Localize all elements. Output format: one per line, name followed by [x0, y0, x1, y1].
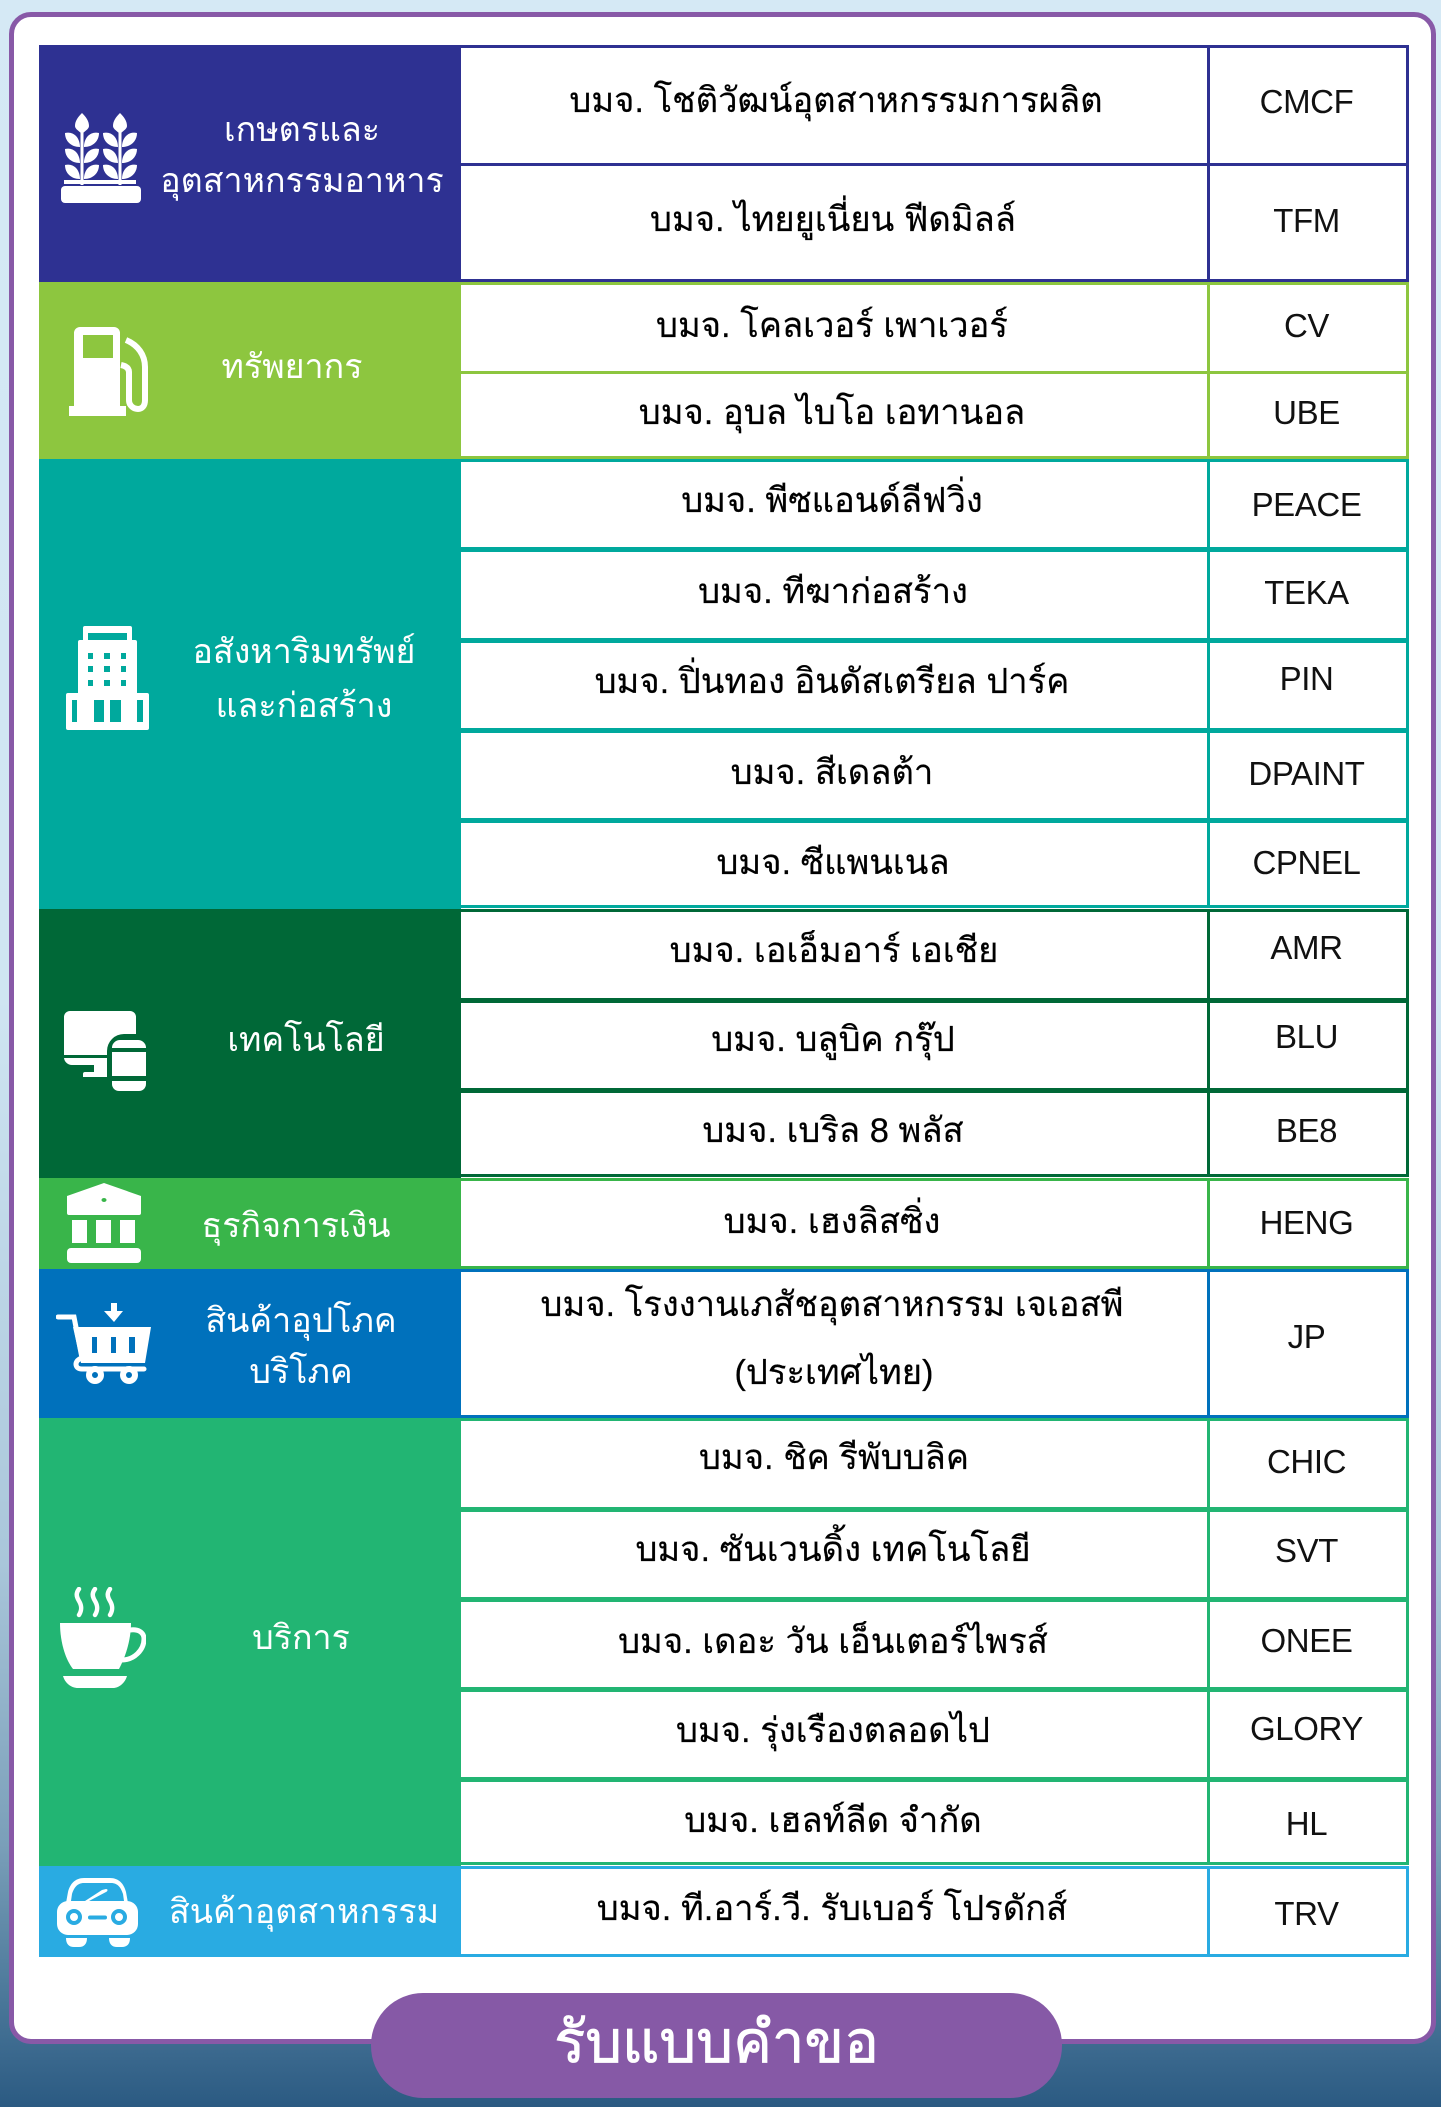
icon: wheat [61, 113, 141, 203]
company name: บมจ. เดอะ วัน เอ็นเตอร์ไพรส์ [618, 1623, 1048, 1661]
ticker: PIN [1280, 660, 1333, 697]
row: HENG [461, 1178, 1409, 1269]
ticker [1207, 1869, 1406, 1954]
company name: บมจ. เอเอ็มอาร์ เอเชีย [670, 932, 998, 970]
panel: services [39, 1418, 1409, 1866]
ticker: BE8 [1276, 1112, 1337, 1149]
ticker: HL [1286, 1805, 1327, 1842]
label: technology: เทคโนโลยี [227, 1021, 385, 1059]
category block: resources [39, 282, 461, 459]
label: finance: ธุรกิจการเงิน [202, 1207, 390, 1245]
panel: resources [39, 282, 1409, 459]
ticker: CV [1284, 307, 1329, 344]
row: TFM [461, 163, 1409, 282]
ticker [1207, 1003, 1406, 1088]
row: HL [461, 1777, 1409, 1865]
row: CPNEL [461, 818, 1409, 908]
ticker: UBE [1273, 394, 1340, 431]
label: construction: และก่อสร้าง [216, 687, 392, 725]
label: agriculture: เกษตรและ [224, 111, 380, 149]
ticker [1207, 1181, 1406, 1266]
ticker: ONEE [1261, 1622, 1352, 1659]
icon: computer and phone [64, 1011, 146, 1091]
company name line 1: บมจ. โรงงานเภสัชอุตสาหกรรม เจเอสพี [541, 1286, 1123, 1324]
panel: finance [39, 1178, 1409, 1269]
ticker: PEACE [1252, 486, 1361, 523]
company name: บมจ. บลูบิค กรุ๊ป [711, 1021, 955, 1059]
row: JP [461, 1269, 1409, 1418]
company name: บมจ. ชิค รีพับบลิค [699, 1439, 969, 1477]
company name: บมจ. ไทยยูเนี่ยน ฟีดมิลล์ [650, 201, 1016, 239]
button: request form: รับแบบคำขอ [554, 2010, 879, 2075]
label: industrials: สินค้าอุตสาหกรรม [169, 1893, 439, 1931]
label: consumer line 2: บริโภค [249, 1353, 353, 1391]
label: property: อสังหาริมทรัพย์ [193, 633, 415, 671]
icon: car [57, 1878, 138, 1947]
row: GLORY [461, 1687, 1409, 1777]
company name: บมจ. ทีฆาก่อสร้าง [698, 573, 968, 611]
ticker [1207, 912, 1406, 999]
ticker: GLORY [1250, 1710, 1363, 1747]
ticker [1207, 1421, 1406, 1508]
row: DPAINT [461, 728, 1409, 818]
ticker: AMR [1270, 929, 1343, 966]
ticker: HENG [1260, 1204, 1353, 1241]
category block: finance [39, 1178, 461, 1269]
row: CMCF [461, 45, 1409, 163]
ticker [1207, 374, 1406, 456]
ticker [1207, 1093, 1406, 1174]
ticker [1207, 643, 1406, 728]
icon: building [66, 626, 149, 730]
button: request form [371, 1993, 1062, 2098]
company name: บมจ. อุบล ไบโอ เอทานอล [639, 394, 1025, 432]
category block: technology [39, 909, 461, 1178]
ticker: CHIC [1267, 1443, 1346, 1480]
label: consumer: สินค้าอุปโภค [205, 1302, 397, 1340]
ticker: BLU [1275, 1018, 1338, 1055]
ticker [1207, 1602, 1406, 1687]
row: TEKA [461, 547, 1409, 638]
company name: บมจ. ซันเวนดิ้ง เทคโนโลยี [635, 1531, 1031, 1569]
panel: consumer products [39, 1269, 1409, 1418]
icon: shopping cart [56, 1303, 151, 1384]
ticker: TFM [1273, 202, 1340, 239]
icon: coffee cup [60, 1587, 146, 1688]
ticker: SVT [1275, 1532, 1338, 1569]
row: ONEE [461, 1597, 1409, 1687]
category block: services [39, 1418, 461, 1866]
category block: agriculture [39, 45, 461, 282]
panel: agriculture and food industry [39, 45, 1409, 282]
company name: บมจ. โชติวัฒน์อุตสาหกรรมการผลิต [569, 82, 1103, 120]
company name: บมจ. ปิ่นทอง อินดัสเตรียล ปาร์ค [595, 663, 1069, 701]
icon: bank [67, 1183, 141, 1263]
ticker [1207, 733, 1406, 818]
ticker: CPNEL [1252, 844, 1361, 881]
company name: บมจ. ซีแพนเนล [716, 844, 950, 882]
row: SVT [461, 1507, 1409, 1597]
ticker [1207, 1512, 1406, 1597]
ticker: TEKA [1264, 574, 1349, 611]
company name: บมจ. โคลเวอร์ เพาเวอร์ [656, 307, 1008, 345]
company name: บมจ. รุ่งเรืองตลอดไป [676, 1712, 990, 1750]
ticker [1207, 823, 1406, 905]
ticker: JP [1288, 1318, 1325, 1355]
row: AMR [461, 909, 1409, 999]
ticker [1207, 48, 1406, 163]
row: CHIC [461, 1418, 1409, 1508]
company name: บมจ. สีเดลต้า [731, 754, 933, 792]
label: services: บริการ [252, 1619, 350, 1657]
company name: บมจ. พีซแอนด์ลีฟวิ่ง [681, 482, 983, 520]
category block: industrials [39, 1866, 461, 1957]
ticker [1207, 285, 1406, 371]
company name line 2: (ประเทศไทย) [734, 1354, 934, 1392]
ticker [1207, 552, 1406, 638]
ticker [1207, 1272, 1406, 1415]
row: CV [461, 282, 1409, 371]
ticker: TRV [1274, 1895, 1339, 1932]
ticker [1207, 1692, 1406, 1777]
icon: fuel pump [69, 327, 148, 416]
row: PIN [461, 638, 1409, 728]
panel: technology [39, 909, 1409, 1178]
row: PEACE [461, 459, 1409, 548]
row: UBE [461, 371, 1409, 459]
row: TRV [461, 1866, 1409, 1957]
category block: property [39, 459, 461, 909]
ticker [1207, 166, 1406, 279]
panel: property and construction [39, 459, 1409, 909]
label: resources: ทรัพยากร [222, 348, 362, 386]
ticker: CMCF [1260, 83, 1353, 120]
company name: บมจ. ที.อาร์.วี. รับเบอร์ โปรดักส์ [597, 1890, 1067, 1928]
category block: consumer [39, 1269, 461, 1418]
row: BE8 [461, 1088, 1409, 1177]
ticker [1207, 462, 1406, 548]
company name: บมจ. เบริล 8 พลัส [702, 1112, 964, 1150]
panel: industrials [39, 1866, 1409, 1957]
label: food industry: อุตสาหกรรมอาหาร [160, 162, 444, 200]
company name: บมจ. เฮงลิสซิ่ง [724, 1203, 940, 1241]
company name: บมจ. เฮลท์ลีด จำกัด [684, 1802, 982, 1840]
ticker [1207, 1782, 1406, 1862]
ticker: DPAINT [1248, 755, 1365, 792]
row: BLU [461, 998, 1409, 1088]
